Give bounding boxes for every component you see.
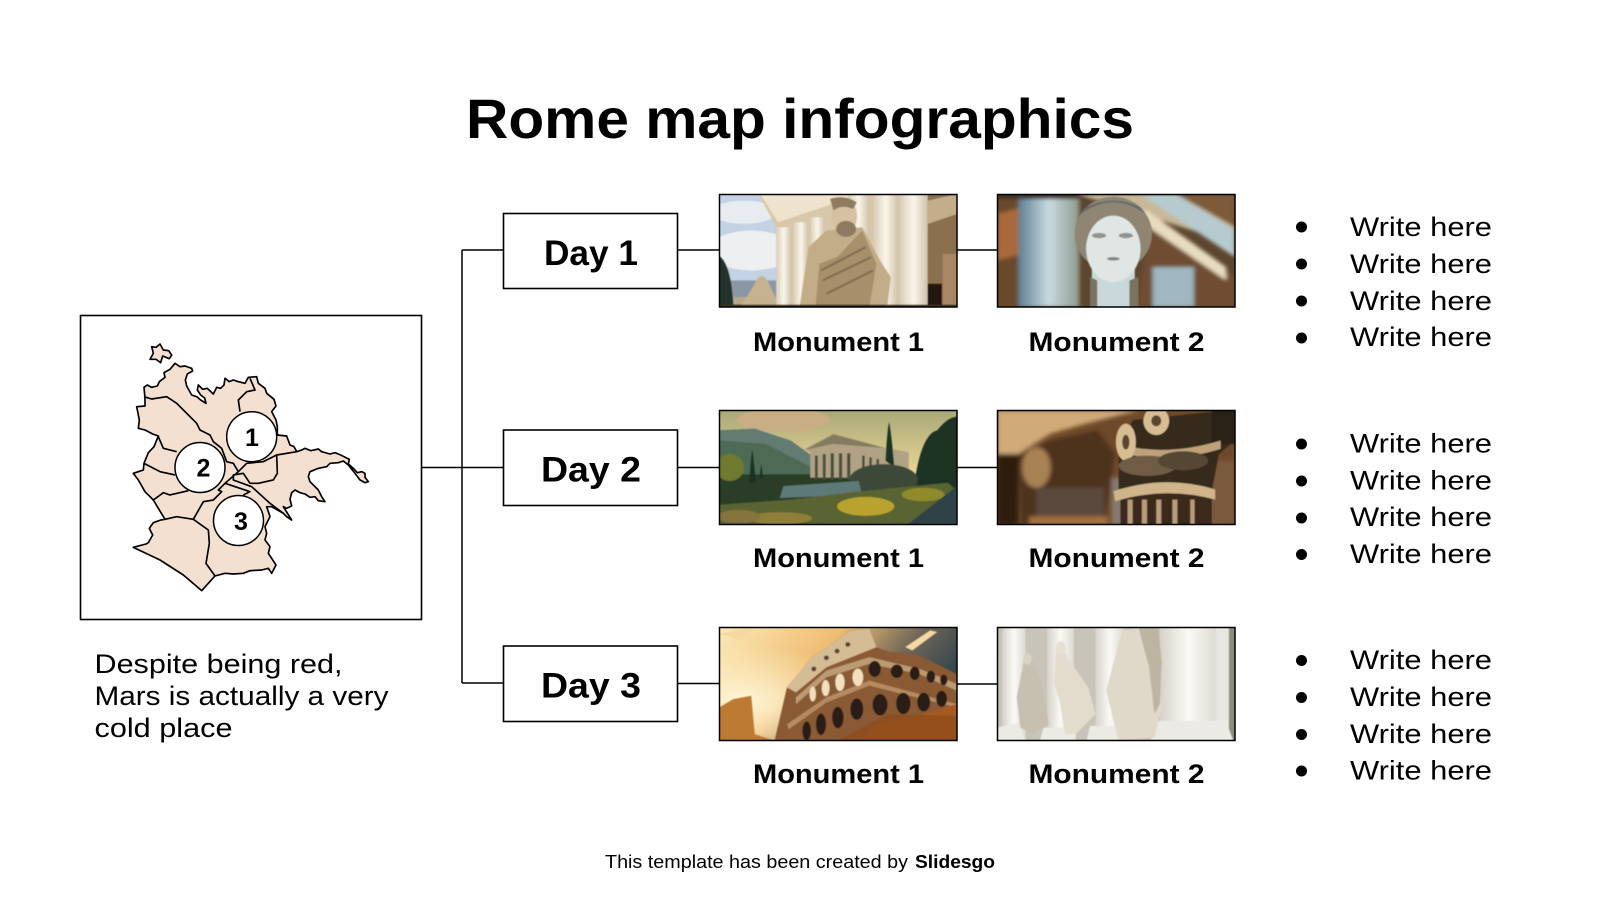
box: Day 3: Day 3 [541, 666, 641, 706]
connector lines [422, 250, 997, 684]
captions: row 3: Monument 2 [1028, 759, 1204, 789]
captions: row 1 [753, 327, 1204, 357]
photo: Greek temple in a landscape [715, 408, 957, 525]
title: Rome map infographics [466, 87, 1134, 150]
photo: ornate column capitals [997, 407, 1235, 525]
marker 3: 3 [234, 508, 248, 536]
captions: row 1: Monument 1 [753, 327, 924, 357]
captions: row 2 [753, 543, 1204, 573]
bullet list: day 3: Write here [1350, 719, 1492, 749]
marker 1: 1 [245, 424, 259, 452]
bullet list: day 3: Write here [1350, 682, 1492, 712]
bullet list: day 3 [1296, 645, 1492, 786]
box: Day 1: Day 1 [544, 234, 638, 273]
bullet list: day 1: Write here [1350, 322, 1492, 352]
captions: row 2: Monument 2 [1028, 543, 1204, 573]
bullet list: day 1: Write here [1350, 249, 1492, 279]
map of Rome [133, 344, 368, 591]
bullet list: day 3: Write here [1350, 645, 1492, 675]
box: Day 2: Day 2 [541, 450, 641, 490]
bullet list: day 2: Write here [1350, 428, 1492, 458]
marker 2 [175, 442, 225, 492]
panel: map [80, 316, 422, 620]
description text: Mars is actually a very [94, 681, 389, 711]
marker 1 [227, 412, 277, 462]
photo: female statue head [997, 194, 1235, 307]
bullet list: day 2: Write here [1350, 539, 1492, 569]
captions: row 3: Monument 1 [753, 759, 924, 789]
captions: row 1: Monument 2 [1028, 327, 1204, 357]
description text [94, 649, 389, 743]
bullet list: day 2: Write here [1350, 502, 1492, 532]
captions: row 2: Monument 1 [753, 543, 924, 573]
marker 3 [214, 496, 264, 546]
description text: cold place [94, 713, 232, 743]
marker 2: 2 [197, 454, 210, 482]
captions: row 3 [753, 759, 1204, 789]
footer credit: This template has been created by [605, 852, 908, 872]
bullet list: day 1: Write here [1350, 212, 1492, 242]
photo: bearded statue and temple [708, 194, 957, 307]
footer credit: Slidesgo [915, 852, 995, 872]
bullet list: day 1 [1296, 212, 1492, 352]
bullet list: day 1: Write here [1350, 286, 1492, 316]
photo: Colosseum at sunset [719, 627, 957, 741]
bullet list: day 2: Write here [1350, 466, 1492, 496]
bullet list: day 3: Write here [1350, 756, 1492, 786]
box: Day 1 [504, 214, 678, 288]
box: Day 2 [504, 430, 678, 506]
bullet list: day 2 [1296, 428, 1492, 569]
description text: Despite being red, [94, 649, 342, 679]
photo: white marble statues [997, 627, 1235, 741]
box: Day 3 [504, 646, 678, 722]
